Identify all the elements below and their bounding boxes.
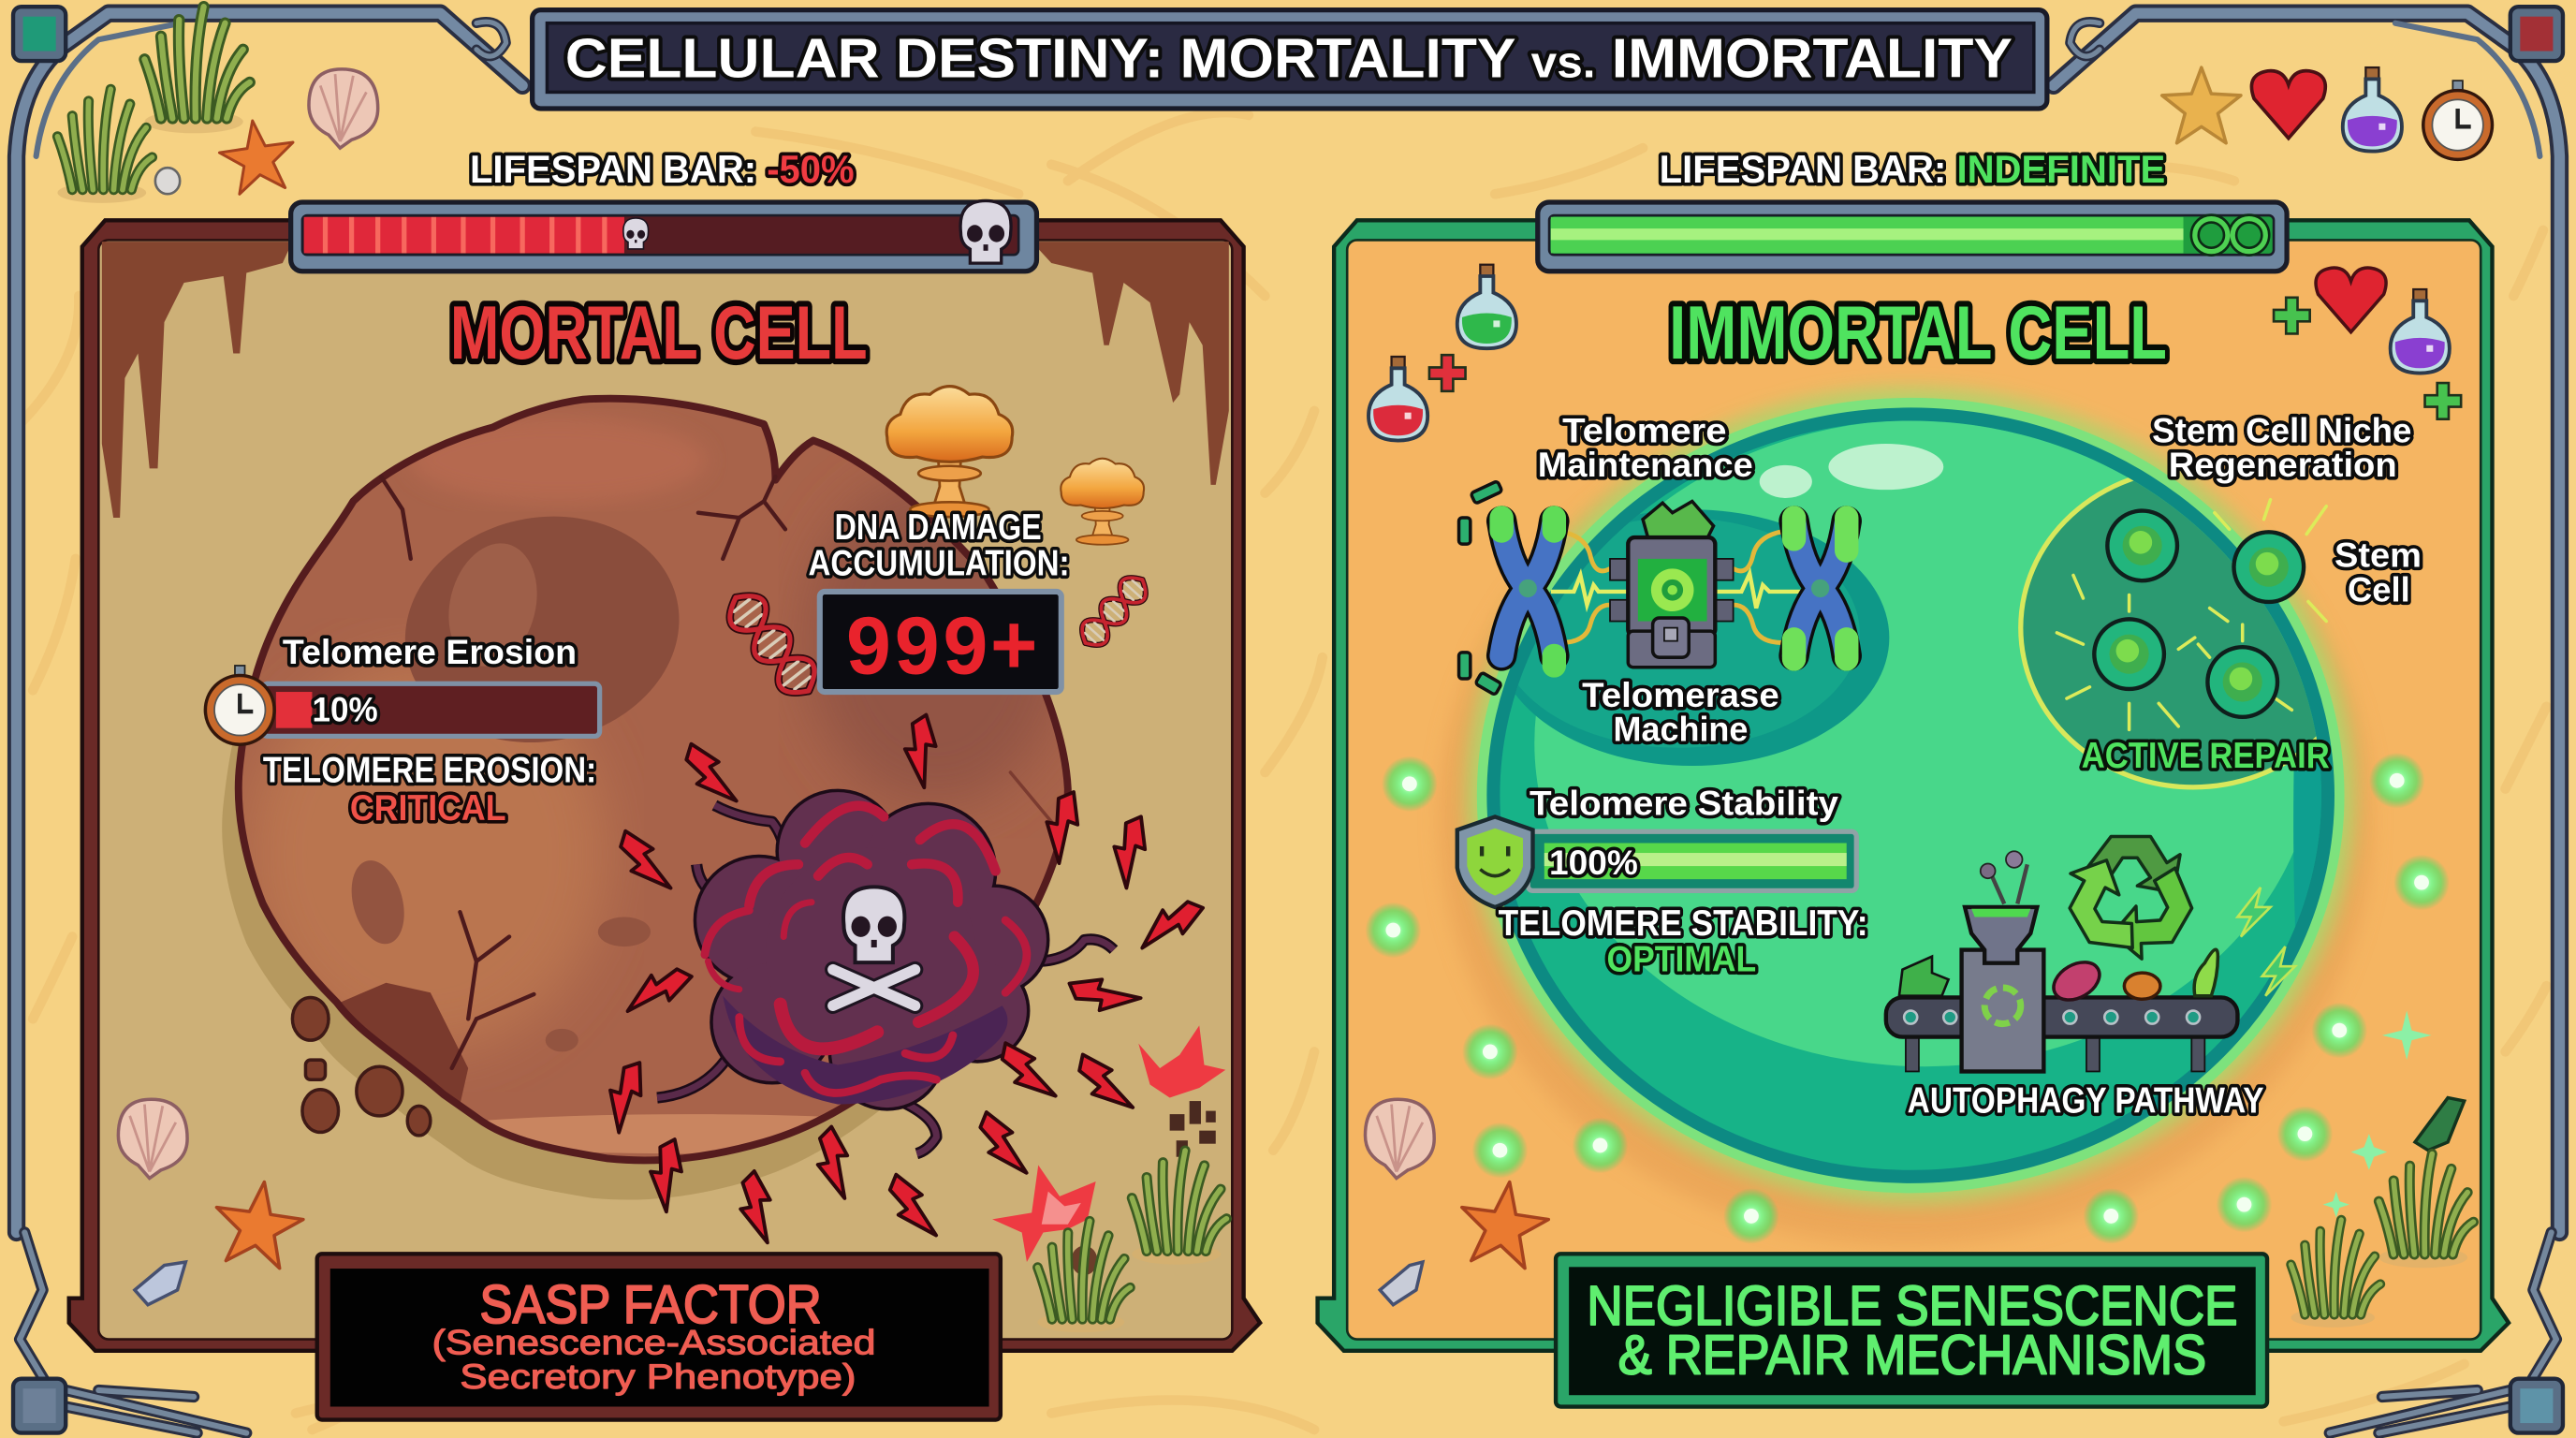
potions and hearts	[1368, 265, 2461, 441]
lifespan label mortal: LIFESPAN BAR: -50%	[470, 147, 855, 191]
icon: dna strand right	[1075, 570, 1153, 653]
dying cell	[222, 399, 1068, 1200]
telomere erosion gauge: 10%	[312, 691, 378, 729]
stem cell niche label	[2152, 411, 2411, 484]
telomerase machine label	[1582, 676, 1779, 749]
telomere stability status	[1499, 903, 1868, 979]
stem cell label	[2334, 536, 2422, 609]
negligible senescence callout: NEGLIGIBLE SENESCENCE	[1587, 1274, 2237, 1337]
stem cell label: Stem	[2334, 536, 2422, 575]
stem cell label: Cell	[2348, 571, 2410, 609]
floating green orbs	[1365, 753, 2450, 1244]
sasp cloud with skull	[657, 789, 1114, 1153]
corner gem bottom left	[13, 1379, 66, 1433]
autophagy label: AUTOPHAGY PATHWAY	[1908, 1080, 2264, 1121]
membrane highlights	[1760, 444, 1943, 498]
corner gem top right	[2510, 7, 2563, 61]
panel frame	[1318, 220, 2509, 1351]
telomere stability status: TELOMERE STABILITY:	[1499, 903, 1868, 944]
telomerase machine	[1610, 501, 1734, 668]
icon: dna strand left	[720, 585, 824, 703]
autophagy conveyor machine	[1886, 851, 2237, 1071]
active repair label: ACTIVE REPAIR	[2082, 736, 2330, 776]
cell debris	[292, 997, 431, 1136]
glowing healthy cell	[1439, 388, 2372, 1246]
red explosion marks	[992, 1025, 1225, 1275]
sasp factor callout	[317, 1254, 1001, 1420]
beach decor top left	[57, 7, 378, 203]
telomere stability status: OPTIMAL	[1606, 939, 1756, 979]
corner gem top left	[13, 7, 66, 61]
icon: chromosome left	[1501, 518, 1554, 666]
icon: chromosome right	[1794, 518, 1847, 659]
telomere maintenance label: Telomere	[1562, 411, 1727, 449]
beach decor in mortal panel	[118, 1099, 1226, 1332]
immortal cell heading: IMMORTAL CELL	[1669, 291, 2167, 375]
panel frame	[69, 220, 1260, 1351]
red lightning toxins	[592, 712, 1208, 1244]
stem cells with sparks	[2056, 500, 2326, 729]
telomere maintenance label: Maintenance	[1538, 446, 1753, 484]
telomere stability gauge: Telomere Stability	[1530, 785, 1838, 823]
title banner: CELLULAR DESTINY: MORTALITY vs. IMMORTALITY	[565, 27, 2012, 90]
icon: mushroom cloud small	[1061, 459, 1144, 545]
stem cell niche	[2018, 477, 2317, 790]
telomerase wires and pulse	[1551, 531, 1801, 643]
lifespan bar immortal	[1538, 202, 2287, 271]
telomere stability gauge	[1457, 785, 1856, 907]
negligible senescence callout	[1556, 1254, 2267, 1407]
cell nucleus	[1495, 509, 1889, 766]
telomere erosion gauge	[205, 633, 600, 744]
panel: immortal cell	[1318, 220, 2509, 1407]
title banner	[533, 10, 2047, 109]
telomere erosion status	[263, 751, 596, 829]
telomerase machine label: Machine	[1614, 711, 1748, 749]
cell nucleus	[384, 492, 700, 768]
beach decor top right: star, heart, potion, clock	[2162, 67, 2492, 159]
beach decor in immortal panel	[1365, 1098, 2473, 1328]
telomere stability gauge: 100%	[1549, 844, 1638, 882]
negligible senescence callout: & REPAIR MECHANISMS	[1618, 1323, 2206, 1386]
panel: mortal cell	[69, 220, 1260, 1420]
corroded drips	[102, 242, 1229, 518]
telomere erosion gauge: Telomere Erosion	[283, 633, 577, 671]
stem cell niche label: Stem Cell Niche	[2152, 411, 2411, 449]
telomerase machine label: Telomerase	[1582, 676, 1779, 714]
sasp factor callout: Secretory Phenotype)	[460, 1357, 856, 1396]
dna damage counter: 999+	[844, 604, 1038, 700]
sasp factor callout: (Senescence-Associated	[432, 1323, 875, 1361]
icon: mushroom cloud large	[886, 387, 1013, 517]
lifespan bar mortal	[291, 200, 1036, 271]
energy bolts	[2237, 888, 2295, 996]
dna damage label	[809, 507, 1070, 583]
mortal cell heading: MORTAL CELL	[450, 291, 868, 375]
telomere maintenance label	[1538, 411, 1753, 484]
corner gem bottom right	[2510, 1379, 2563, 1433]
dna damage label: DNA DAMAGE	[835, 507, 1042, 548]
telomere erosion status: CRITICAL	[350, 788, 506, 829]
sasp factor callout: SASP FACTOR	[479, 1275, 822, 1335]
stem cell niche label: Regeneration	[2169, 446, 2397, 484]
cracks	[381, 477, 1051, 1068]
lifespan label immortal: LIFESPAN BAR: INDEFINITE	[1660, 147, 2165, 191]
telomere erosion status: TELOMERE EROSION:	[263, 751, 596, 791]
green sparkles	[2323, 1011, 2432, 1218]
recycling symbol	[2055, 836, 2205, 968]
dna damage label: ACCUMULATION:	[809, 543, 1070, 583]
telomere fragments	[1459, 481, 1502, 695]
